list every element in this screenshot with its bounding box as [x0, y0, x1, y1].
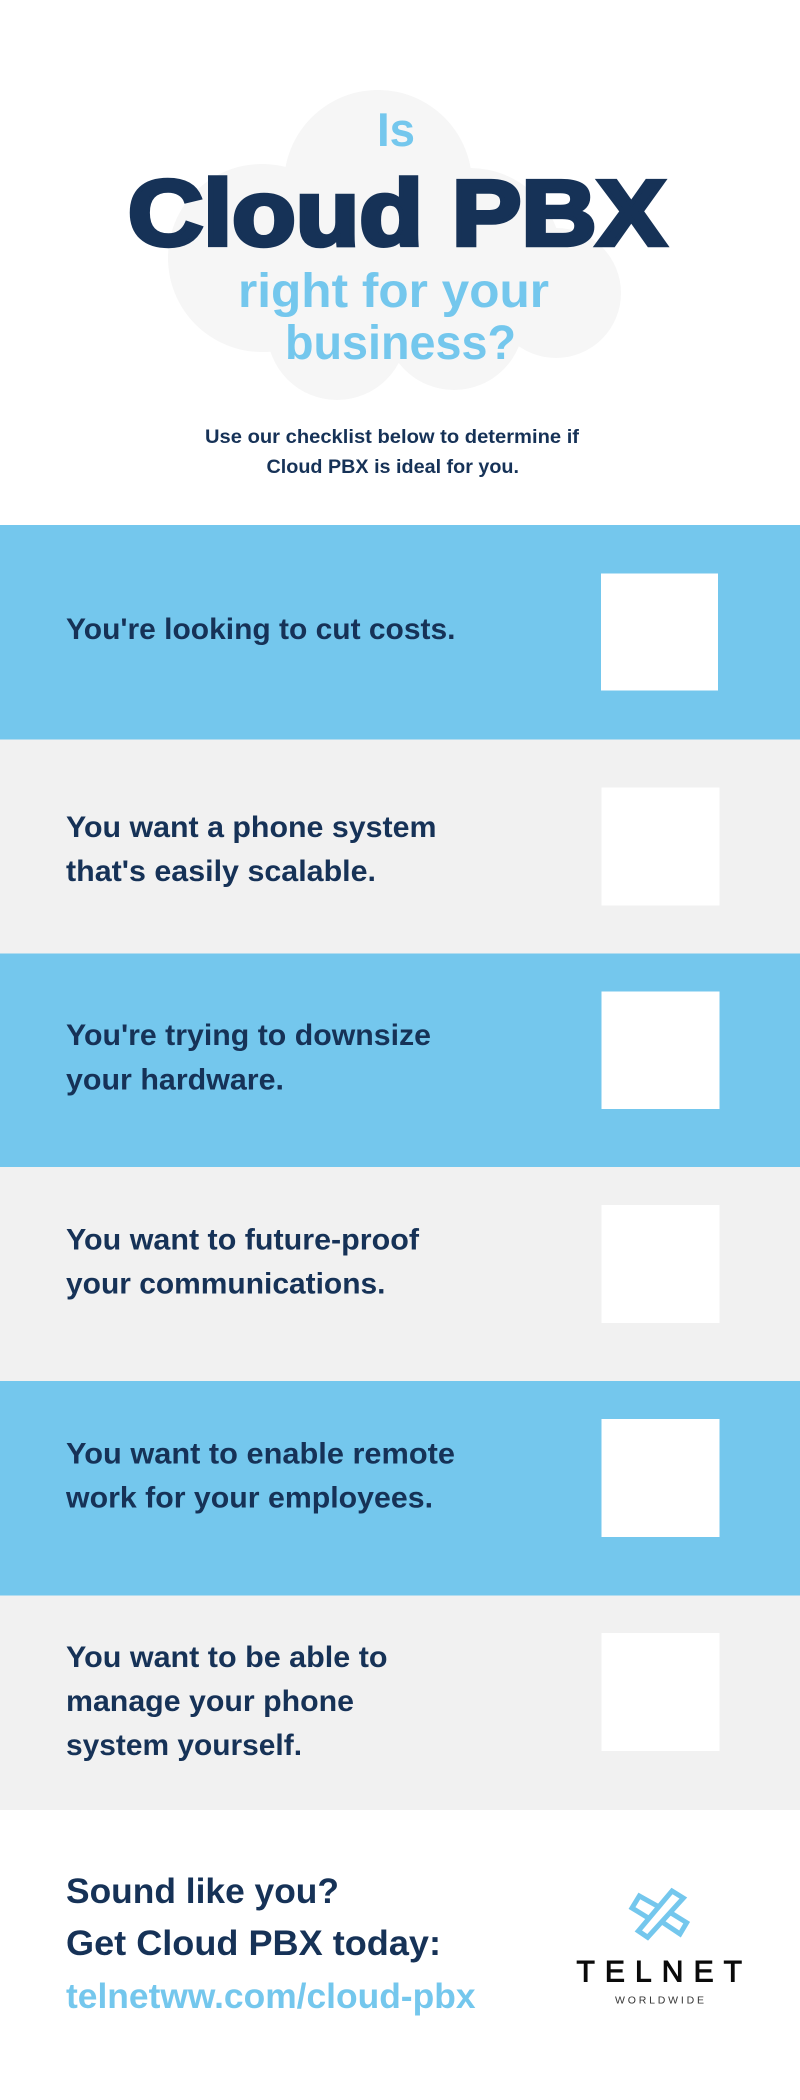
item text: You want to be able to	[66, 1641, 388, 1674]
logo: Telnet Worldwide	[576, 1891, 742, 2006]
item text: work for your employees.	[65, 1482, 433, 1514]
panel: self-manage	[0, 1596, 800, 1810]
title: Cloud PBX: Cloud PBX	[128, 161, 666, 265]
item text	[66, 1019, 431, 1096]
item text: system yourself.	[66, 1729, 302, 1762]
checkbox	[602, 1633, 720, 1751]
item text: You want to enable remote	[66, 1438, 455, 1470]
subtitle	[205, 426, 580, 478]
item text: You want a phone system	[66, 811, 437, 844]
icon: cloud background	[168, 90, 621, 400]
logo wordmark: TELNET	[576, 1956, 742, 1988]
item text: You want to future-proof	[66, 1224, 420, 1256]
call to action: Get Cloud PBX today:	[66, 1924, 441, 1963]
logo tagline: WORLDWIDE	[615, 1994, 704, 2006]
header	[128, 90, 666, 478]
title: Is: Is	[377, 103, 415, 156]
item text: You're looking to cut costs.	[66, 613, 456, 646]
checkbox	[602, 788, 720, 906]
panel: future-proof	[0, 1167, 800, 1381]
item text: manage your phone	[66, 1685, 354, 1718]
checkbox	[602, 1205, 720, 1323]
panel: cut costs	[0, 525, 800, 740]
checkbox	[601, 574, 718, 690]
icon: telnet mark	[632, 1891, 687, 1937]
panel: downsize hardware	[0, 954, 800, 1167]
item text: your hardware.	[66, 1064, 284, 1096]
item text: that's easily scalable.	[66, 855, 376, 888]
item text: You're trying to downsize	[66, 1019, 431, 1052]
title: business?: business?	[285, 317, 516, 370]
call to action: telnetww.com/cloud-pbx	[66, 1977, 476, 2016]
panel: remote work	[0, 1381, 800, 1596]
panel: scalable	[0, 740, 800, 954]
item text: your communications.	[66, 1268, 386, 1300]
call to action	[66, 1872, 476, 2016]
item text	[65, 1438, 455, 1514]
subtitle: Cloud PBX is ideal for you.	[266, 456, 519, 478]
item text	[66, 1224, 420, 1300]
item text	[66, 811, 437, 888]
call to action: Sound like you?	[66, 1872, 339, 1911]
checkbox	[602, 992, 720, 1109]
subtitle: Use our checklist below to determine if	[205, 426, 580, 448]
checkbox	[602, 1419, 720, 1537]
title: right for your: right for your	[238, 265, 549, 318]
item text	[66, 1641, 388, 1762]
